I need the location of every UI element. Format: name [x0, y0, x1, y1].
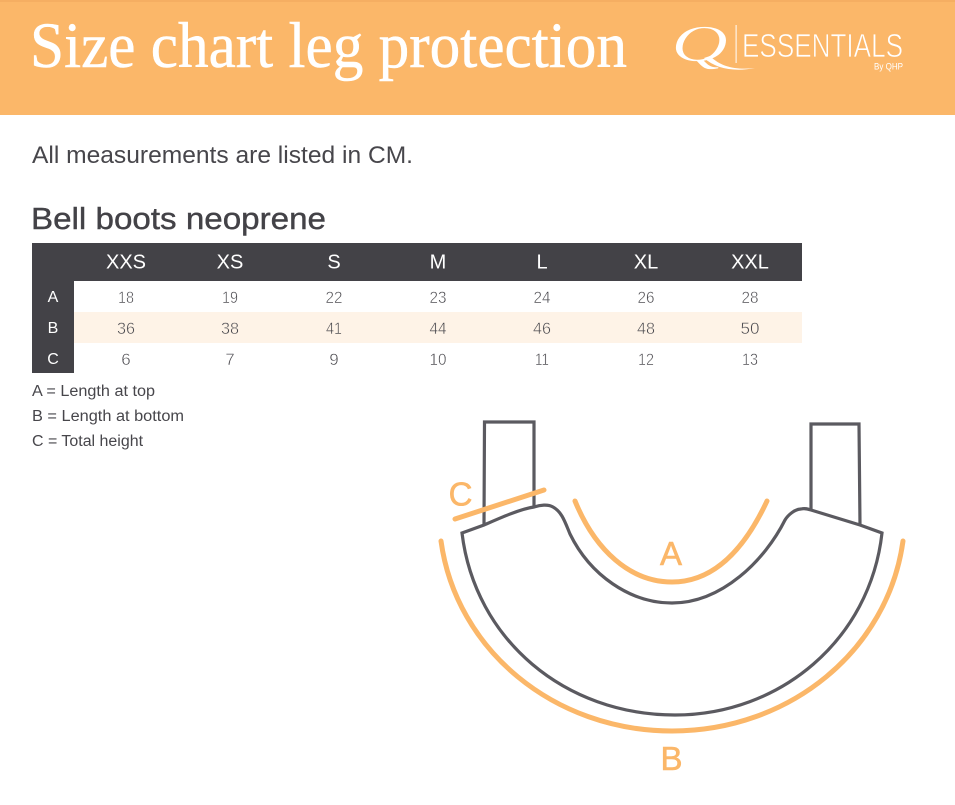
row B values: 48 — [637, 319, 655, 338]
row C values: 13 — [742, 350, 758, 369]
table header row: XXS — [106, 252, 146, 274]
row A values: 18 — [118, 288, 134, 307]
title: Size chart leg protection — [30, 10, 627, 82]
row A values: 23 — [430, 288, 446, 307]
row A values — [118, 288, 758, 307]
row C values: 10 — [430, 350, 446, 369]
row B values: 38 — [221, 319, 239, 338]
measure line A — [575, 501, 767, 582]
measure line B — [441, 541, 903, 731]
row C values: 12 — [638, 350, 654, 369]
section heading: Bell boots neoprene — [31, 201, 326, 236]
row C values: 9 — [329, 350, 339, 369]
row B values: 41 — [326, 319, 342, 338]
row A values: 28 — [742, 288, 758, 307]
row A values: 24 — [534, 288, 550, 307]
table header row: M — [430, 252, 446, 274]
measurement legend: A = Length at top — [32, 383, 155, 400]
table header row: XL — [634, 252, 658, 274]
measurement legend: B = Length at bottom — [32, 408, 184, 425]
row labels — [47, 289, 59, 368]
measure line C — [455, 490, 544, 519]
bell boot diagram — [441, 422, 903, 777]
logo: Q Essentials by QHP — [671, 16, 903, 73]
row A values: 22 — [326, 288, 342, 307]
row A values: 26 — [638, 288, 654, 307]
label C: C — [449, 476, 472, 512]
row C values: 11 — [535, 350, 549, 369]
row labels: C — [47, 351, 59, 368]
row A values: 19 — [222, 288, 238, 307]
measurement legend — [32, 383, 184, 450]
row C values: 7 — [225, 350, 235, 369]
boot outline — [462, 422, 882, 715]
row C values: 6 — [121, 350, 131, 369]
label A: A — [660, 535, 682, 572]
table header row: XXL — [731, 252, 769, 274]
table header row: S — [327, 252, 341, 274]
row B values: 44 — [430, 319, 446, 338]
row B values: 50 — [740, 319, 760, 338]
row B values: 36 — [117, 319, 135, 338]
logo: Q Essentials by QHP: Q — [671, 16, 728, 73]
row labels: B — [48, 320, 58, 337]
measurement legend: C = Total height — [32, 433, 144, 450]
intro text: All measurements are listed in CM. — [32, 142, 413, 169]
table header row: XS — [217, 252, 243, 274]
label B: B — [660, 740, 683, 777]
table header row: L — [536, 252, 548, 274]
table header row — [106, 252, 769, 274]
logo: Q Essentials by QHP: By QHP — [874, 62, 903, 72]
row B values — [117, 319, 760, 338]
logo: Q Essentials by QHP: ESSENTIALS — [742, 27, 903, 64]
row C values — [121, 350, 758, 369]
row labels: A — [48, 289, 59, 306]
row B values: 46 — [533, 319, 551, 338]
header banner — [0, 0, 955, 115]
size table — [32, 243, 802, 373]
